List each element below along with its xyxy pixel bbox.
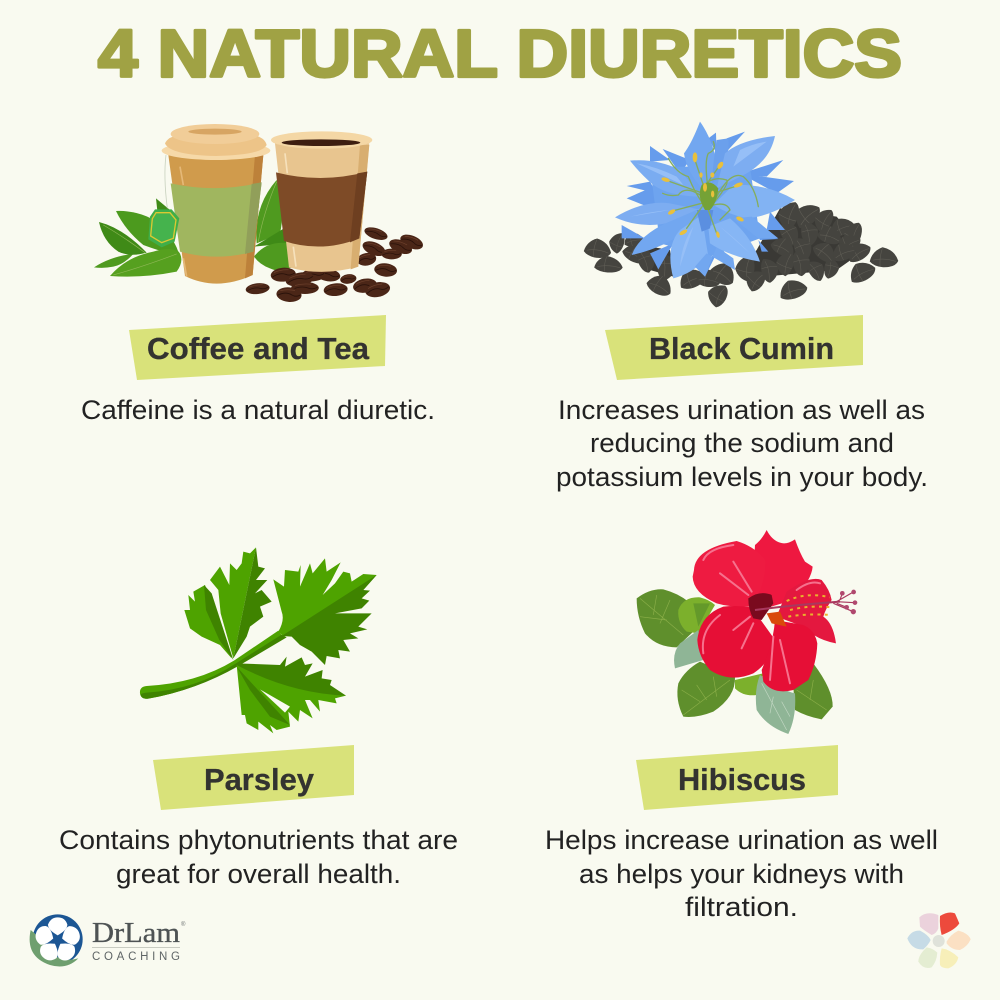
heading banner: parsley (153, 745, 354, 810)
panel: black cumin (556, 122, 928, 492)
text: black cumin description: reducing the sodium and (590, 428, 894, 458)
panel: parsley (59, 547, 458, 889)
icon: back petals (622, 132, 794, 277)
icon: pastel flower (907, 912, 971, 968)
icon: anthers (661, 152, 744, 238)
logo: DrLam Coaching: COACHING (92, 951, 180, 963)
icon: pistil (755, 590, 857, 617)
heading banner: parsley: Parsley (204, 762, 315, 797)
text: hibiscus description (545, 825, 938, 922)
heading banner: coffee and tea: Coffee and Tea (147, 331, 370, 366)
icon: stem (140, 631, 287, 699)
title: 4 NATURAL DIURETICS (98, 16, 902, 92)
text: coffee and tea description: Caffeine is a natural diuretic. (81, 395, 435, 425)
icon: flower centre (748, 593, 787, 627)
icon: tea leaves left (94, 198, 181, 277)
text: hibiscus description: Helps increase urination as well (545, 825, 938, 855)
icon: stamens (663, 142, 758, 233)
text: black cumin description: potassium levels in your body. (556, 462, 928, 492)
icon: bottom leaves (237, 657, 346, 733)
icon: petals (693, 530, 836, 691)
logo: DrLam Coaching (30, 914, 186, 966)
icon: tea bag tag (148, 155, 179, 247)
heading banner: hibiscus (636, 745, 838, 810)
heading banner: coffee and tea (129, 315, 386, 380)
icon: leaves (637, 589, 833, 734)
text: parsley description: great for overall health. (116, 859, 401, 889)
heading banner: black cumin: Black Cumin (649, 331, 834, 366)
illustration: hibiscus flower (637, 530, 857, 734)
icon: top right leaf (273, 558, 377, 665)
illustration: coffee and tea cups (94, 124, 425, 303)
logo wordmark: DrLam (92, 917, 180, 949)
text: black cumin description (556, 395, 928, 492)
heading banner: black cumin (605, 315, 863, 380)
icon: petal highlights (703, 545, 820, 683)
icon: logo flower mark (30, 914, 83, 966)
text: black cumin description: Increases urination as well as (558, 395, 925, 425)
icon: tea cup (162, 124, 270, 284)
heading banner: hibiscus: Hibiscus (678, 762, 806, 797)
icon: seed pile (583, 198, 899, 310)
text: parsley description: Contains phytonutrients that are (59, 825, 458, 855)
illustration: parsley sprig (140, 547, 377, 733)
text: parsley description (59, 825, 458, 889)
icon: coffee beans (245, 225, 425, 303)
icon: front petals (615, 122, 795, 278)
icon: top left leaves (184, 547, 272, 660)
icon: tea leaves right (254, 180, 293, 270)
text: hibiscus description: as helps your kidneys with (579, 859, 904, 889)
panel: coffee and tea (81, 124, 435, 425)
logo: DrLam Coaching: ® (181, 921, 186, 928)
text: hibiscus description: filtration. (685, 892, 798, 922)
panel: hibiscus (545, 530, 938, 922)
illustration: black cumin flower and seeds (583, 122, 899, 310)
icon: coffee cup (271, 131, 372, 272)
